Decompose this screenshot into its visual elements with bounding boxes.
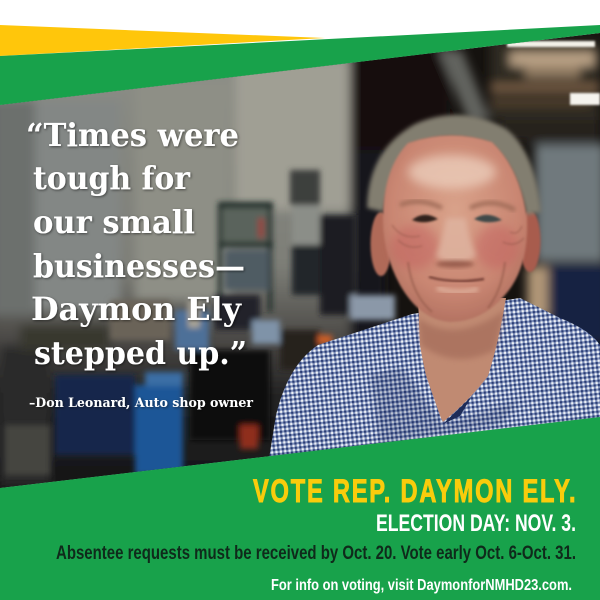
headline: vote: VOTE REP. DAYMON ELY. (253, 474, 576, 509)
smile lines (408, 262, 505, 312)
eye wrinkles (392, 225, 524, 247)
hair (367, 115, 541, 215)
collar (372, 298, 516, 424)
neck (418, 298, 506, 422)
quote text: stepped up.” (34, 334, 247, 372)
head (367, 115, 541, 322)
cheeks (391, 225, 439, 269)
ears (370, 212, 392, 276)
mouth (429, 277, 484, 281)
top green band (0, 25, 600, 105)
quote text: Daymon Ely (31, 290, 242, 328)
brow shadow (400, 202, 515, 210)
quote text: businesses— (33, 247, 245, 285)
nose (436, 218, 476, 263)
eyes (412, 215, 438, 222)
quote text: tough for (33, 159, 191, 197)
forehead highlight (408, 155, 496, 189)
shop background (0, 30, 600, 500)
shirt (268, 298, 600, 470)
quote attribution: –Don Leonard, Auto shop owner (29, 396, 253, 411)
photo: candidate in auto shop (0, 30, 600, 500)
neck shadow (418, 310, 505, 359)
bottom green panel (0, 417, 600, 600)
yellow wedge (0, 25, 325, 56)
shirt shading (370, 368, 520, 445)
shelf unit (218, 202, 273, 209)
quote text: our small (33, 203, 195, 241)
quote text (26, 116, 247, 372)
quote text: “Times were (26, 116, 239, 154)
face (383, 135, 527, 322)
